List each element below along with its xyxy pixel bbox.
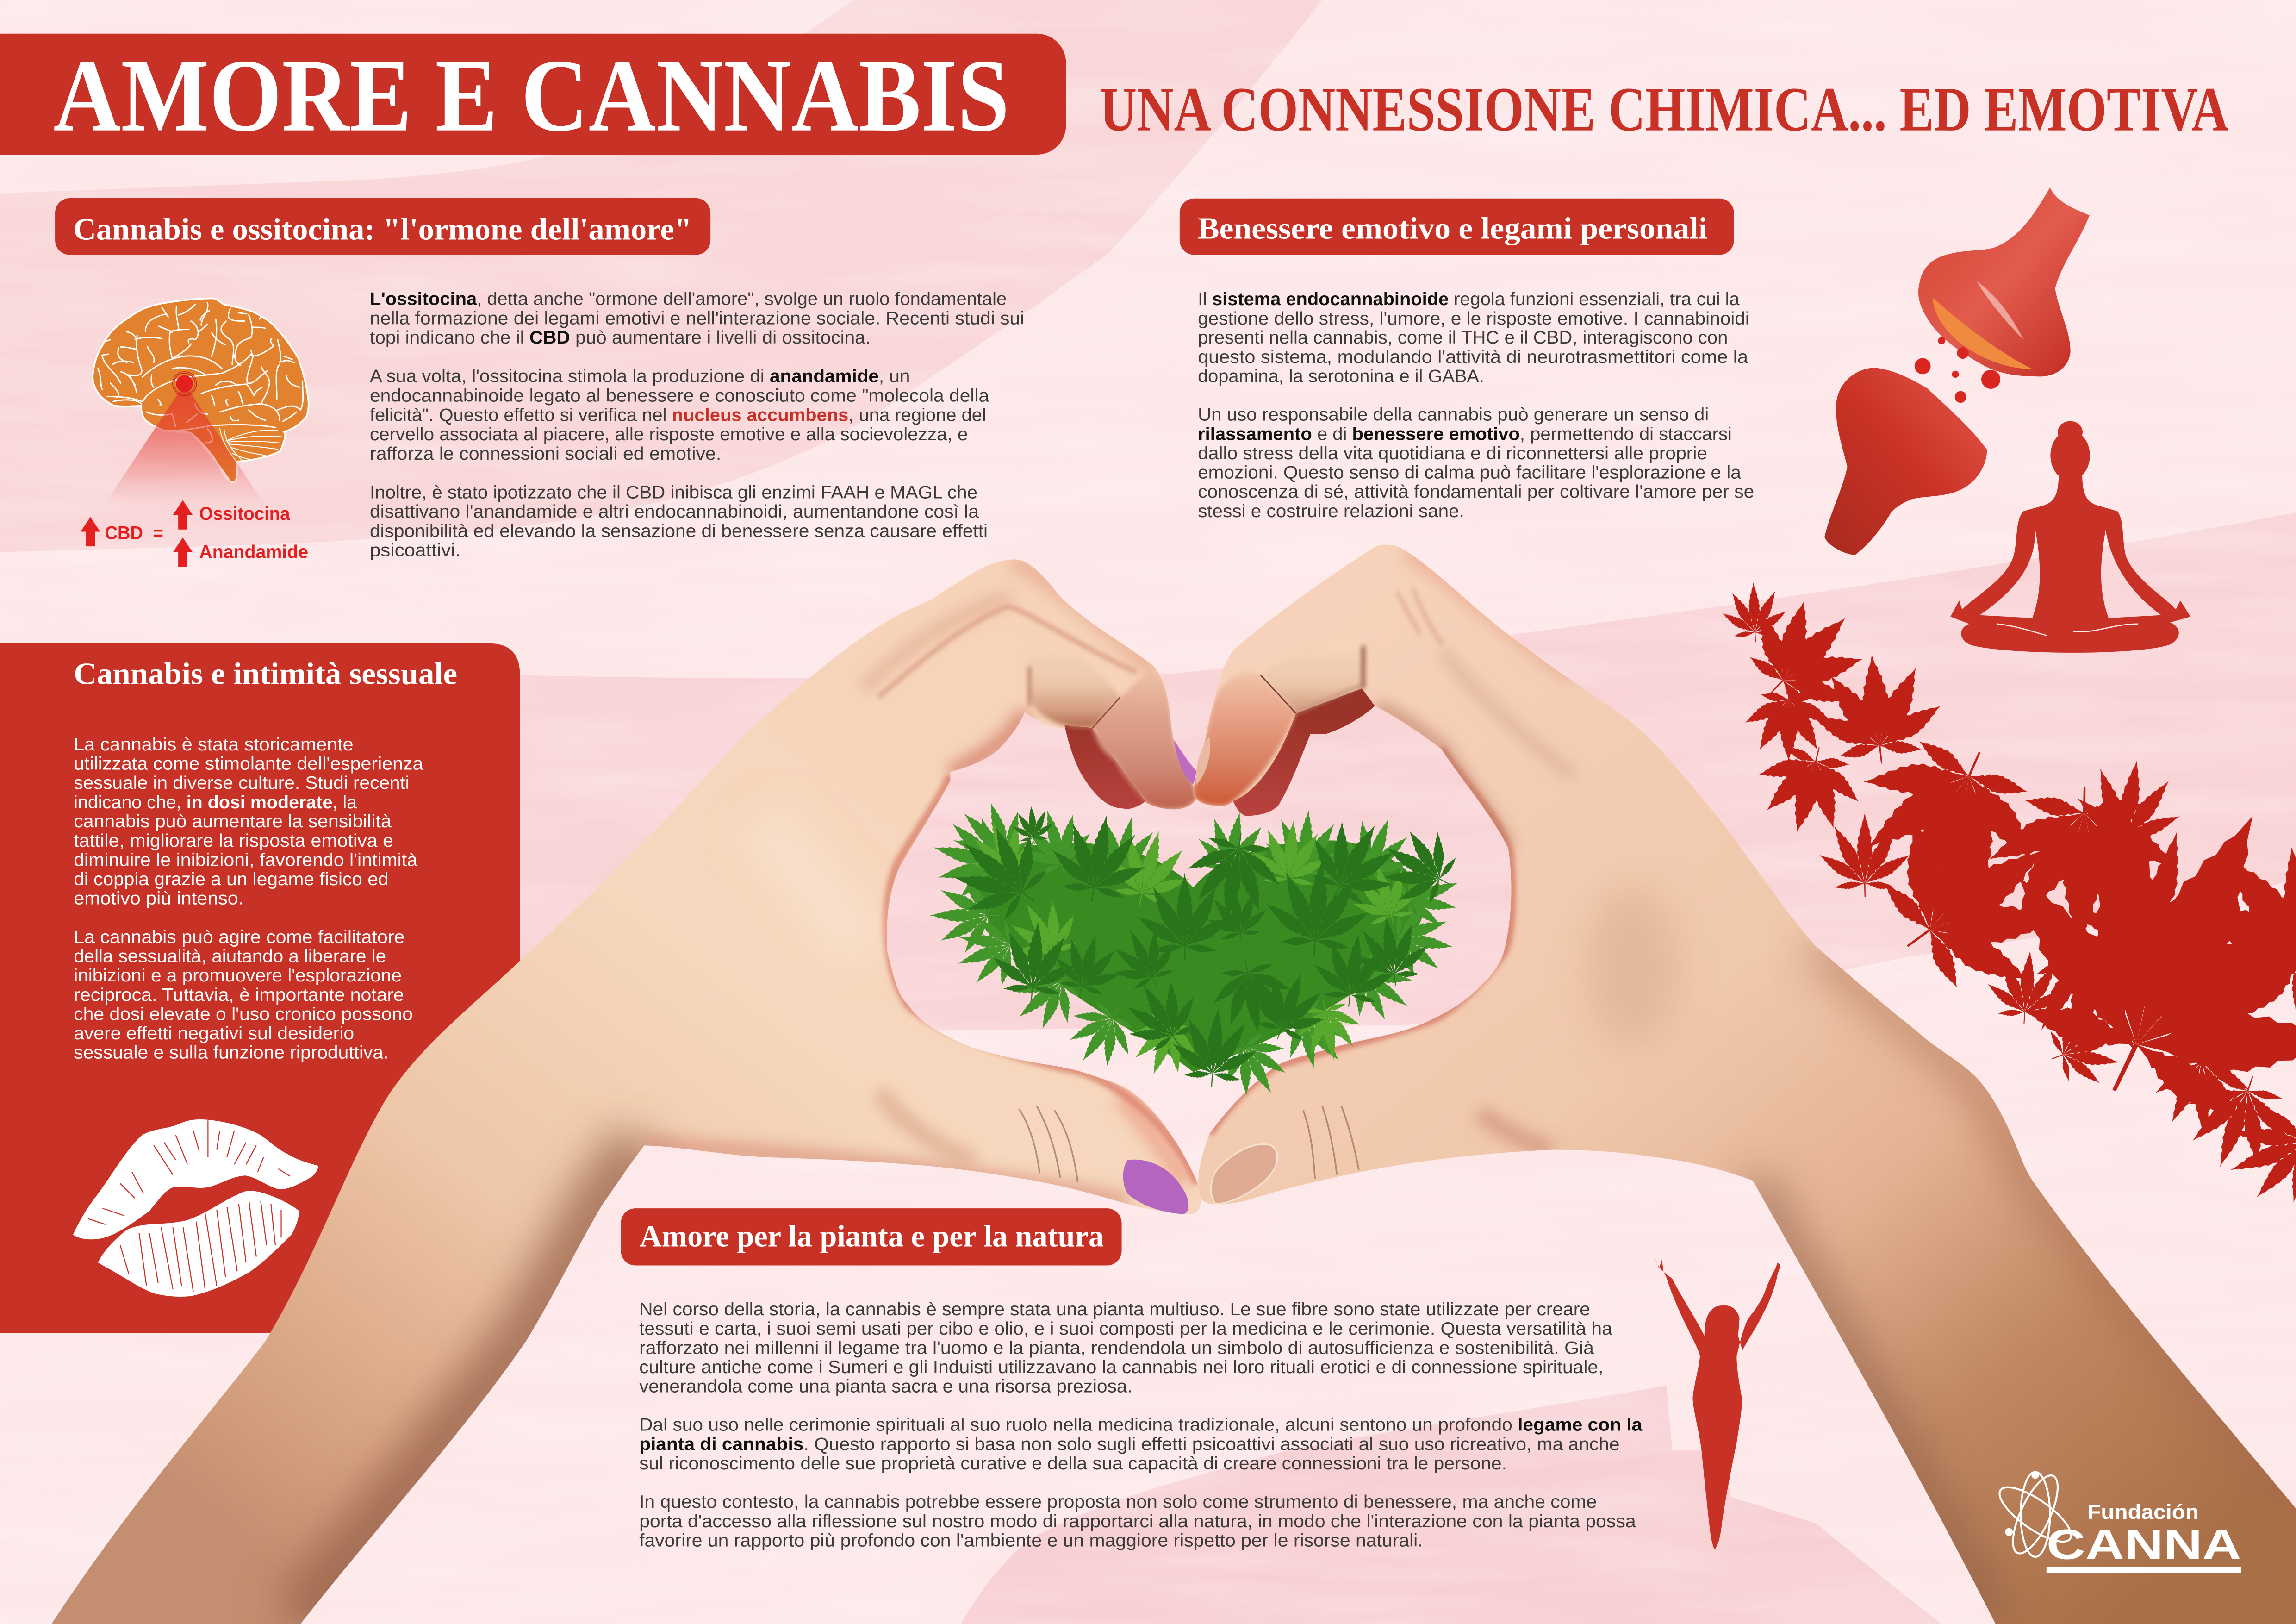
icon: brain [93,298,309,506]
text: intimita: della sessualità, aiutando a liberare le [74,947,386,967]
text: ossitocina: rafforza le connessioni sociali ed emotive. [370,444,721,464]
logo: Fundacion CANNA [1992,1470,2241,1573]
illustration: cannabis leaf heart [922,783,1471,1111]
heading: intimita: Cannabis e intimità sessuale [74,657,457,691]
text: natura: tessuti e carta, i suoi semi usati per cibo e olio, e i suoi composti per la medicina e le cerimonie. Questa versatilità ha [639,1319,1612,1339]
text: natura: Nel corso della storia, la cannabis è sempre stata una pianta multiuso. Le sue fibre sono state utilizzate per creare [639,1299,1590,1319]
icon: atom [1992,1470,2078,1559]
text: intimita: La cannabis è stata storicamente [74,735,354,755]
finger: left ring shadow [1064,725,1145,809]
nail: left thumb [1123,1160,1188,1214]
text: ossitocina: A sua volta, l'ossitocina stimola la produzione di anandamide , un [370,367,910,387]
text: ossitocina: L'ossitocina , detta anche "ormone dell'amore", svolge un ruolo fondamentale [370,289,1007,309]
finger: right index [1194,672,1296,806]
text: natura: favorire un rapporto più profondo con l'ambiente e un maggiore rispetto per le risorse naturali. [639,1530,1423,1550]
text: natura: pianta di cannabis . Questo rapporto si basa non solo sugli effetti psicoattivi associati al suo uso ricreativo, ma anche [639,1434,1620,1454]
text: intimita: cannabis può aumentare la sensibilità [74,812,392,831]
finger: right ring shadow [1233,688,1375,816]
text: intimita: inibizioni e a promuovere l'esplorazione [74,966,402,986]
text: ossitocina: nella formazione dei legami emotivi e nell'interazione sociale. Recenti studi sui [370,308,1024,328]
text: benessere: questo sistema, modulando l'attività di neurotrasmettitori come la [1198,347,1748,367]
text: benessere: Il sistema endocannabinoide regola funzioni essenziali, tra cui la [1198,289,1740,309]
formula: CBD: = [153,523,163,543]
logo: Fundacion CANNA: CANNA [2047,1521,2241,1568]
text: ossitocina: disattivano l'anandamide e altri endocannabinoidi, aumentandone così la [370,502,979,522]
text: intimita: La cannabis può agire come facilitatore [74,927,404,947]
text: intimita: tattile, migliorare la risposta emotiva e [74,831,393,851]
icon: woman silhouette [1655,1258,1780,1549]
text: intimita: che dosi elevate o l'uso cronico possono [74,1004,413,1024]
text: ossitocina: Inoltre, è stato ipotizzato che il CBD inibisca gli enzimi FAAH e MAGL che [370,482,977,502]
illustration: left hand [51,559,1201,1624]
heading: ossitocina: Cannabis e ossitocina: "l'ormone dell'amore" [73,213,692,247]
heading: benessere: Benessere emotivo e legami personali [1198,212,1707,246]
text: intimita: utilizzata come stimolante dell'esperienza [74,754,423,774]
text: ossitocina: endocannabinoide legato al benessere e conosciuto come "molecola della [370,386,989,406]
text: intimita: sessuale in diverse culture. Studi recenti [74,773,410,793]
text: intimita: emotivo più intenso. [74,889,243,909]
text: benessere: Un uso responsabile della cannabis può generare un senso di [1198,405,1709,425]
text: ossitocina: disponibilità ed elevando la sensazione di benessere senza causare effetti [370,521,988,541]
text: ossitocina: topi indicano che il CBD può aumentare i livelli di ossitocina. [370,328,871,348]
formula: CBD [81,500,308,567]
panel: cannabis e ossitocina [55,198,1024,567]
icon: lips [73,1119,318,1297]
text: intimita: indicano che, in dosi moderate , la [74,793,357,812]
icon: synapse [1824,187,2090,555]
main title: AMORE E CANNABIS [53,38,1009,153]
text: intimita: reciproca. Tuttavia, è importante notare [74,985,404,1005]
text: benessere: presenti nella cannabis, come il THC e il CBD, interagiscono con [1198,328,1728,348]
formula: CBD: Anandamide [199,542,308,562]
text: benessere: dopamina, la serotonina e il GABA. [1198,366,1484,386]
panel: cannabis e intimita sessuale [0,643,520,1333]
heading: benessere [1180,199,1734,255]
text: benessere: gestione dello stress, l'umore, e le risposte emotive. I cannabinoidi [1198,309,1749,329]
nail: right index [1196,737,1210,785]
text: benessere [1198,289,1754,521]
text: natura: Dal suo uso nelle cerimonie spirituali al suo ruolo nella medicina tradizionale, alcuni sentono un profondo legame con la [639,1415,1643,1435]
text: benessere: emozioni. Questo senso di calma può facilitare l'esplorazione e la [1198,463,1741,483]
text: ossitocina: cervello associata al piacere, alle risposte emotive e alla socievolezza, e [370,425,968,444]
formula: CBD: Ossitocina [199,504,290,524]
title banner [0,34,1066,155]
text: intimita: avere effetti negativi sul desiderio [74,1024,354,1043]
text: natura: culture antiche come i Sumeri e gli Induisti utilizzavano la cannabis nei loro rituali erotici e di connessione spirituale, [639,1357,1603,1377]
formula: CBD: CBD [105,523,143,543]
text: benessere: dallo stress della vita quotidiana e di riconnettersi alle proprie [1198,443,1707,463]
text: ossitocina [370,289,1024,561]
text: benessere: conoscenza di sé, attività fondamentali per coltivare l'amore per se [1198,482,1754,502]
panel: benessere emotivo [1180,187,2190,653]
nail: left index [1174,740,1196,785]
text: natura: sul riconoscimento delle sue proprietà curative e della sua capacità di creare connessioni tra le persone. [639,1454,1507,1474]
nail: right thumb [1211,1144,1277,1204]
finger: right fold [1261,640,1363,713]
panel: amore per la pianta [621,1208,1780,1550]
text: benessere: stessi e costruire relazioni sane. [1198,501,1464,521]
text: intimita [74,735,423,1062]
text: intimita: sessuale e sulla funzione riproduttiva. [74,1043,388,1062]
heading: ossitocina [55,198,710,255]
text: ossitocina: felicità". Questo effetto si verifica nel nucleus accumbens , una regione del [370,405,986,425]
heading: natura [621,1208,1122,1266]
text: natura: venerandola come una pianta sacra e una risorsa preziosa. [639,1376,1132,1396]
text: natura: rafforzato nei millenni il legame tra l'uomo e la pianta, rendendola un simbolo di autosufficienza e sostenibilità. Già [639,1338,1594,1358]
text: natura: In questo contesto, la cannabis potrebbe essere proposta non solo come strumento di benessere, ma anche come [639,1492,1597,1512]
text: natura [639,1299,1643,1550]
logo: Fundacion CANNA: Fundación [2087,1501,2199,1524]
icon: meditating figure [1950,421,2190,653]
text: ossitocina: psicoattivi. [370,541,460,561]
text: intimita: diminuire le inibizioni, favorendo l'intimità [74,850,417,870]
finger: left index [1092,667,1196,810]
text: benessere: rilassamento e di benessere emotivo , permettendo di staccarsi [1198,424,1732,444]
illustration: right hand [1194,545,2296,1624]
text: intimita: di coppia grazie a un legame fisico ed [74,869,388,889]
heading: natura: Amore per la pianta e per la natura [640,1219,1104,1253]
text: natura: porta d'accesso alla riflessione sul nostro modo di rapportarci alla natura, in modo che l'interazione con la pianta possa [639,1512,1636,1531]
illustration: red cannabis leaves [1719,571,2296,1222]
finger: left fold [1028,644,1120,728]
